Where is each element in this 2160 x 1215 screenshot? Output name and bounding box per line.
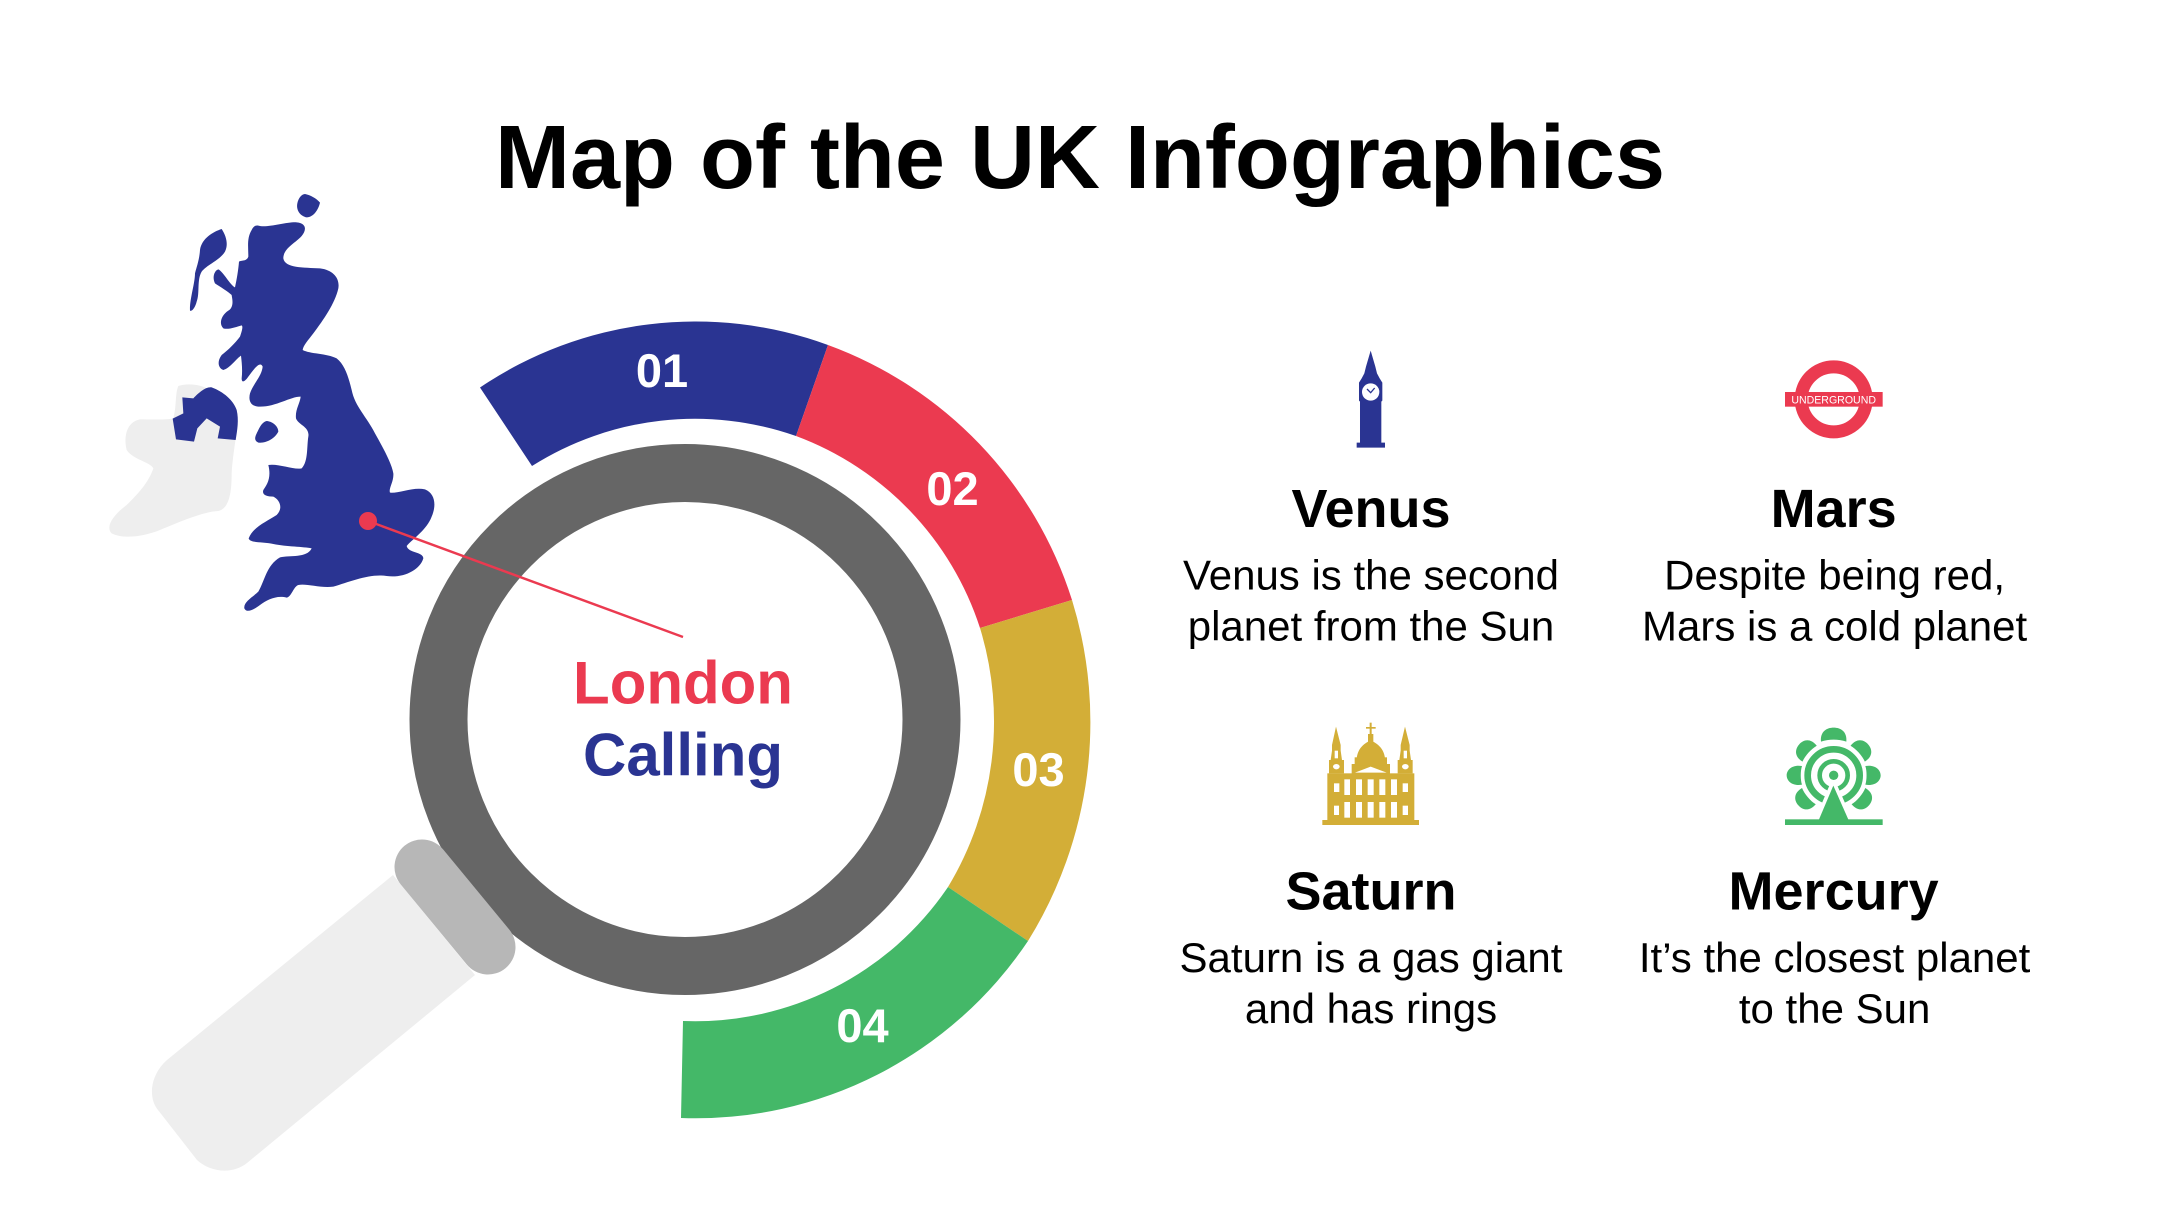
- Great Britain and islands: [173, 194, 434, 611]
- London pointer line: [359, 512, 683, 637]
- Mars heading: Mars: [1771, 479, 1897, 539]
- segment 01: [480, 322, 828, 466]
- title: Map of the UK Infographics: [495, 108, 1665, 208]
- map of the UK: [109, 194, 434, 611]
- segment 04: [681, 887, 1028, 1118]
- magnifier collar: [422, 867, 488, 947]
- magnifier handle: [152, 875, 475, 1171]
- segment 02: [796, 345, 1072, 628]
- Mars description: [1642, 552, 2028, 650]
- segment 01: 01: [636, 344, 688, 397]
- centre label: London: [573, 650, 793, 716]
- icon: St Paul's Cathedral: [1322, 723, 1419, 825]
- Venus description: [1183, 552, 1559, 650]
- icon: London Eye: [1785, 728, 1883, 825]
- Mercury description: to the Sun: [1739, 985, 1930, 1032]
- icon: Underground roundel: [1785, 367, 1883, 432]
- Mercury heading: Mercury: [1729, 862, 1939, 922]
- centre label: [573, 650, 793, 788]
- segment 04: 04: [836, 999, 889, 1052]
- Saturn description: Saturn is a gas giant: [1180, 934, 1563, 981]
- Mars description: Despite being red,: [1664, 552, 2005, 598]
- Venus description: planet from the Sun: [1188, 602, 1554, 650]
- Mercury description: [1639, 934, 2031, 1032]
- Saturn heading: Saturn: [1285, 862, 1457, 922]
- Mars description: Mars is a cold planet: [1642, 602, 2028, 650]
- segment 03: 03: [1012, 743, 1065, 796]
- Venus description: Venus is the second: [1183, 552, 1559, 598]
- segment 03: [948, 600, 1090, 941]
- Mercury description: It’s the closest planet: [1639, 934, 2031, 981]
- Saturn description: [1180, 934, 1563, 1032]
- Saturn description: and has rings: [1245, 985, 1497, 1032]
- centre label: Calling: [583, 722, 783, 788]
- Ireland landmass: [109, 384, 237, 537]
- Venus heading: Venus: [1291, 479, 1451, 539]
- segment 02: 02: [926, 462, 979, 515]
- magnifier lens ring: [438, 473, 932, 966]
- icon: Underground roundel: UNDERGROUND: [1791, 395, 1876, 407]
- icon: Big Ben: [1357, 351, 1385, 448]
